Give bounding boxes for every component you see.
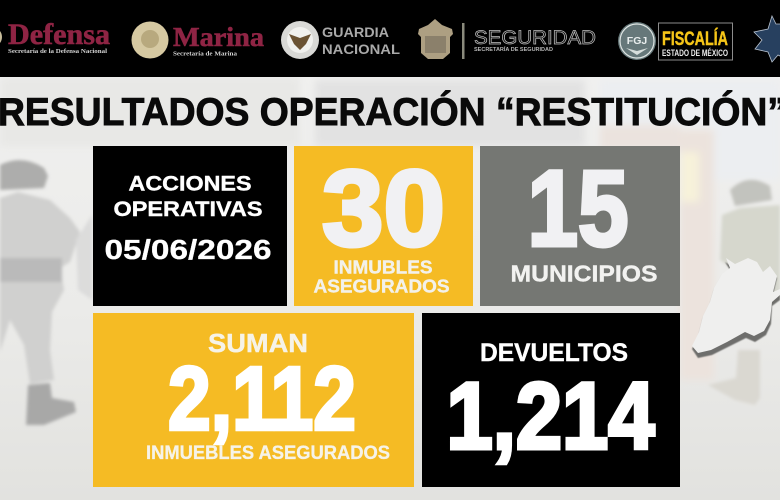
logo: Defensa: Defensa — [8, 18, 110, 51]
logo: Seguridad: SECRETARÍA DE SEGURIDAD — [474, 45, 553, 53]
logo: Seguridad: SEGURIDAD — [474, 28, 596, 49]
logo: Fiscalía Estado de México: ESTADO DE MÉXICO — [662, 48, 728, 58]
logo: FGJ seal — [618, 22, 656, 60]
soldier right — [708, 180, 780, 405]
panel: suman 2,112: SUMAN — [208, 328, 308, 358]
icon: police star — [754, 16, 780, 62]
logo: Marina: Secretaría de Marina — [173, 50, 238, 58]
panel: 30 inmuebles asegurados: INMUBLES — [334, 256, 432, 278]
logo: Fiscalía Estado de México — [658, 23, 732, 60]
logo: Guardia Nacional: NACIONAL — [322, 42, 400, 57]
logo: Guardia Nacional: GUARDIA — [322, 25, 389, 40]
logo: Edomex shield — [418, 19, 453, 59]
logo: Marina — [132, 22, 265, 58]
logo: Defensa: Secretaría de la Defensa Nacional — [8, 49, 107, 55]
panel: acciones operativas: ACCIONES — [128, 172, 252, 196]
panel: acciones operativas — [93, 146, 287, 306]
logo: Fiscalía Estado de México: FISCALÍA — [662, 28, 728, 50]
logo: Marina: Marina — [173, 22, 265, 52]
panel: 30 inmuebles asegurados: 30 — [322, 148, 445, 268]
panel: suman 2,112: INMUEBLES ASEGURADOS — [146, 443, 390, 464]
soldier left — [0, 160, 92, 425]
panel: devueltos 1,214: 1,214 — [446, 364, 655, 470]
panel: acciones operativas: 05/06/2026 — [104, 234, 272, 265]
logo: Guardia Nacional — [281, 21, 400, 59]
panel: 30 inmuebles asegurados: ASEGURADOS — [314, 276, 450, 296]
panel: 15 municipios: 15 — [528, 148, 628, 268]
panel: acciones operativas: OPERATIVAS — [114, 198, 262, 221]
panel: devueltos 1,214 — [422, 313, 680, 487]
map of the State of Mexico — [692, 258, 780, 358]
panel: suman 2,112: 2,112 — [168, 350, 356, 450]
header band — [0, 0, 780, 77]
divider line — [462, 23, 464, 59]
panel: suman 2,112 — [93, 313, 414, 487]
logo: FGJ seal: FGJ — [627, 35, 647, 47]
panel: 15 municipios: MUNICIPIOS — [510, 260, 658, 286]
panel: devueltos 1,214: DEVUELTOS — [480, 339, 628, 367]
panel: 15 municipios — [480, 146, 680, 306]
panel: 30 inmuebles asegurados — [294, 146, 473, 306]
